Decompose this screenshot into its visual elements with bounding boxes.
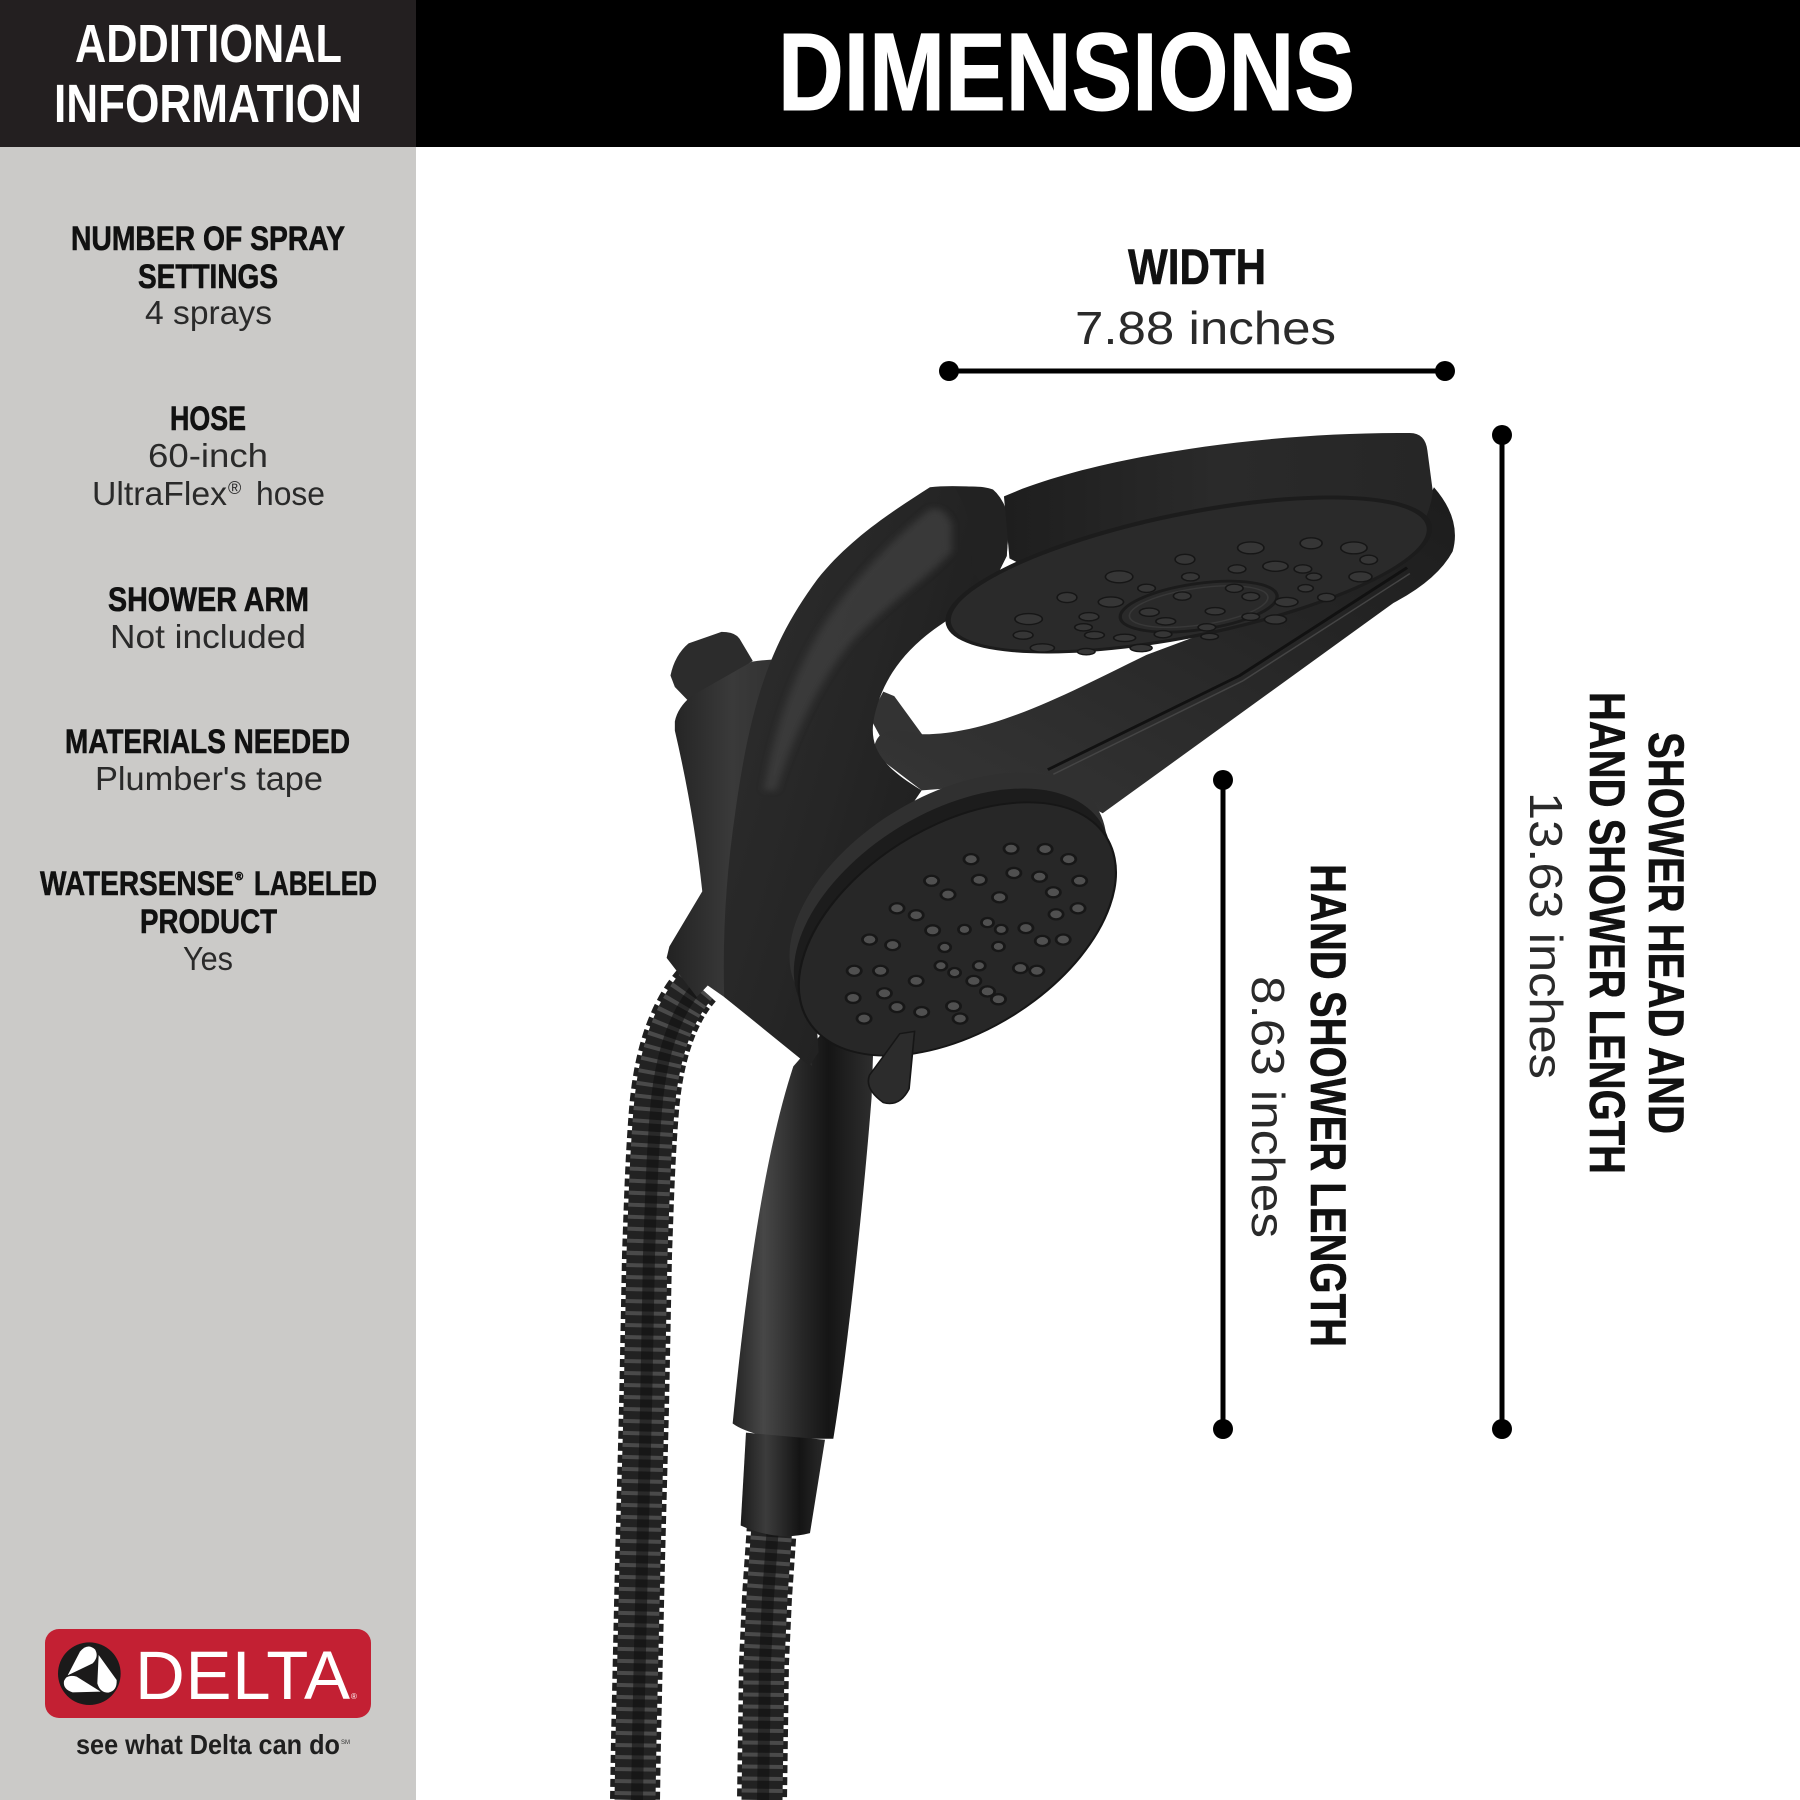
- spec: watersense labeled product: ®: [235, 871, 243, 883]
- spec: number of spray settings: 4 sprays: [145, 294, 272, 331]
- face center ring: [1116, 572, 1282, 641]
- dimension: shower head and hand shower length: 13.63 inches: [1520, 792, 1572, 1079]
- spec: hose: ®: [228, 478, 241, 498]
- dimension: shower head and hand shower length: [1492, 425, 1694, 1439]
- logo: delta: [45, 1629, 371, 1760]
- product illustration: dual shower head: [635, 433, 1455, 1800]
- spec: materials needed: [65, 723, 350, 797]
- header: additional information: INFORMATION: [54, 74, 362, 134]
- spec: hose: HOSE: [170, 400, 246, 438]
- header: dimensions title: [416, 0, 1800, 147]
- dimension: width: 7.88 inches: [1075, 302, 1336, 354]
- top head face: [928, 463, 1450, 686]
- spec: shower arm: Not included: [110, 618, 306, 655]
- hand shower nozzles: [846, 844, 1087, 1024]
- header: additional information: [0, 0, 416, 147]
- spec: number of spray settings: [71, 220, 345, 331]
- top head nozzles: [1013, 538, 1377, 655]
- icon: delta triangle mark: [58, 1642, 121, 1705]
- dimension: shower head and hand shower length: HAND SHOWER LENGTH: [1579, 692, 1635, 1174]
- blade highlight: [764, 509, 952, 790]
- logo: delta: see what Delta can do: [76, 1729, 340, 1760]
- hand shower handle: [733, 1036, 873, 1536]
- hand shower face: [742, 753, 1173, 1105]
- spec: watersense labeled product: LABELED: [254, 865, 377, 903]
- lower arm: [873, 487, 1455, 813]
- mount nub: [670, 632, 753, 704]
- spec: watersense labeled product: WATERSENSE: [40, 865, 234, 903]
- wall mount body: [667, 659, 812, 1066]
- dimension: hand shower length: [1213, 770, 1356, 1439]
- hand shower trigger: [868, 1031, 915, 1103]
- dimension: shower head and hand shower length: SHOWER HEAD AND: [1638, 732, 1694, 1134]
- logo: delta: SM: [341, 1740, 350, 1746]
- spec: hose: hose: [256, 475, 325, 512]
- blade collar: [955, 486, 1009, 593]
- spec: watersense labeled product: [40, 865, 377, 977]
- top head rim: [1004, 433, 1433, 584]
- shower body, drawn in head-detail coordinates: [667, 433, 1455, 1105]
- dimension: width: [939, 239, 1455, 381]
- spec: hose: UltraFlex: [92, 475, 227, 512]
- spec: shower arm: [108, 581, 309, 655]
- spec: materials needed: MATERIALS NEEDED: [65, 723, 350, 761]
- spec: hose: 60-inch: [148, 437, 268, 474]
- small rear mount piece: [870, 692, 923, 742]
- dimension: hand shower length: HAND SHOWER LENGTH: [1300, 864, 1356, 1347]
- spec: watersense labeled product: PRODUCT: [140, 903, 277, 941]
- header: additional information: ADDITIONAL: [75, 14, 342, 74]
- header: dimensions title: DIMENSIONS: [778, 11, 1355, 134]
- spec: watersense labeled product: Yes: [183, 940, 233, 977]
- dimension: hand shower length: 8.63 inches: [1242, 976, 1294, 1238]
- logo: delta: DELTA: [135, 1637, 350, 1714]
- spec: number of spray settings: SETTINGS: [138, 258, 278, 296]
- spec: shower arm: SHOWER ARM: [108, 581, 309, 619]
- spec: materials needed: Plumber's tape: [95, 760, 323, 797]
- spec: hose: [92, 400, 325, 512]
- spec: number of spray settings: NUMBER OF SPRAY: [71, 220, 345, 258]
- panel: additional information sidebar: [0, 147, 416, 1800]
- hose: left: [635, 985, 699, 1800]
- dimension: width: WIDTH: [1128, 239, 1266, 295]
- hand shower rim: [732, 723, 1168, 1091]
- curved blade bracket: [724, 486, 1009, 1066]
- logo: delta: ®: [351, 1692, 357, 1701]
- hose: right: [762, 1525, 773, 1800]
